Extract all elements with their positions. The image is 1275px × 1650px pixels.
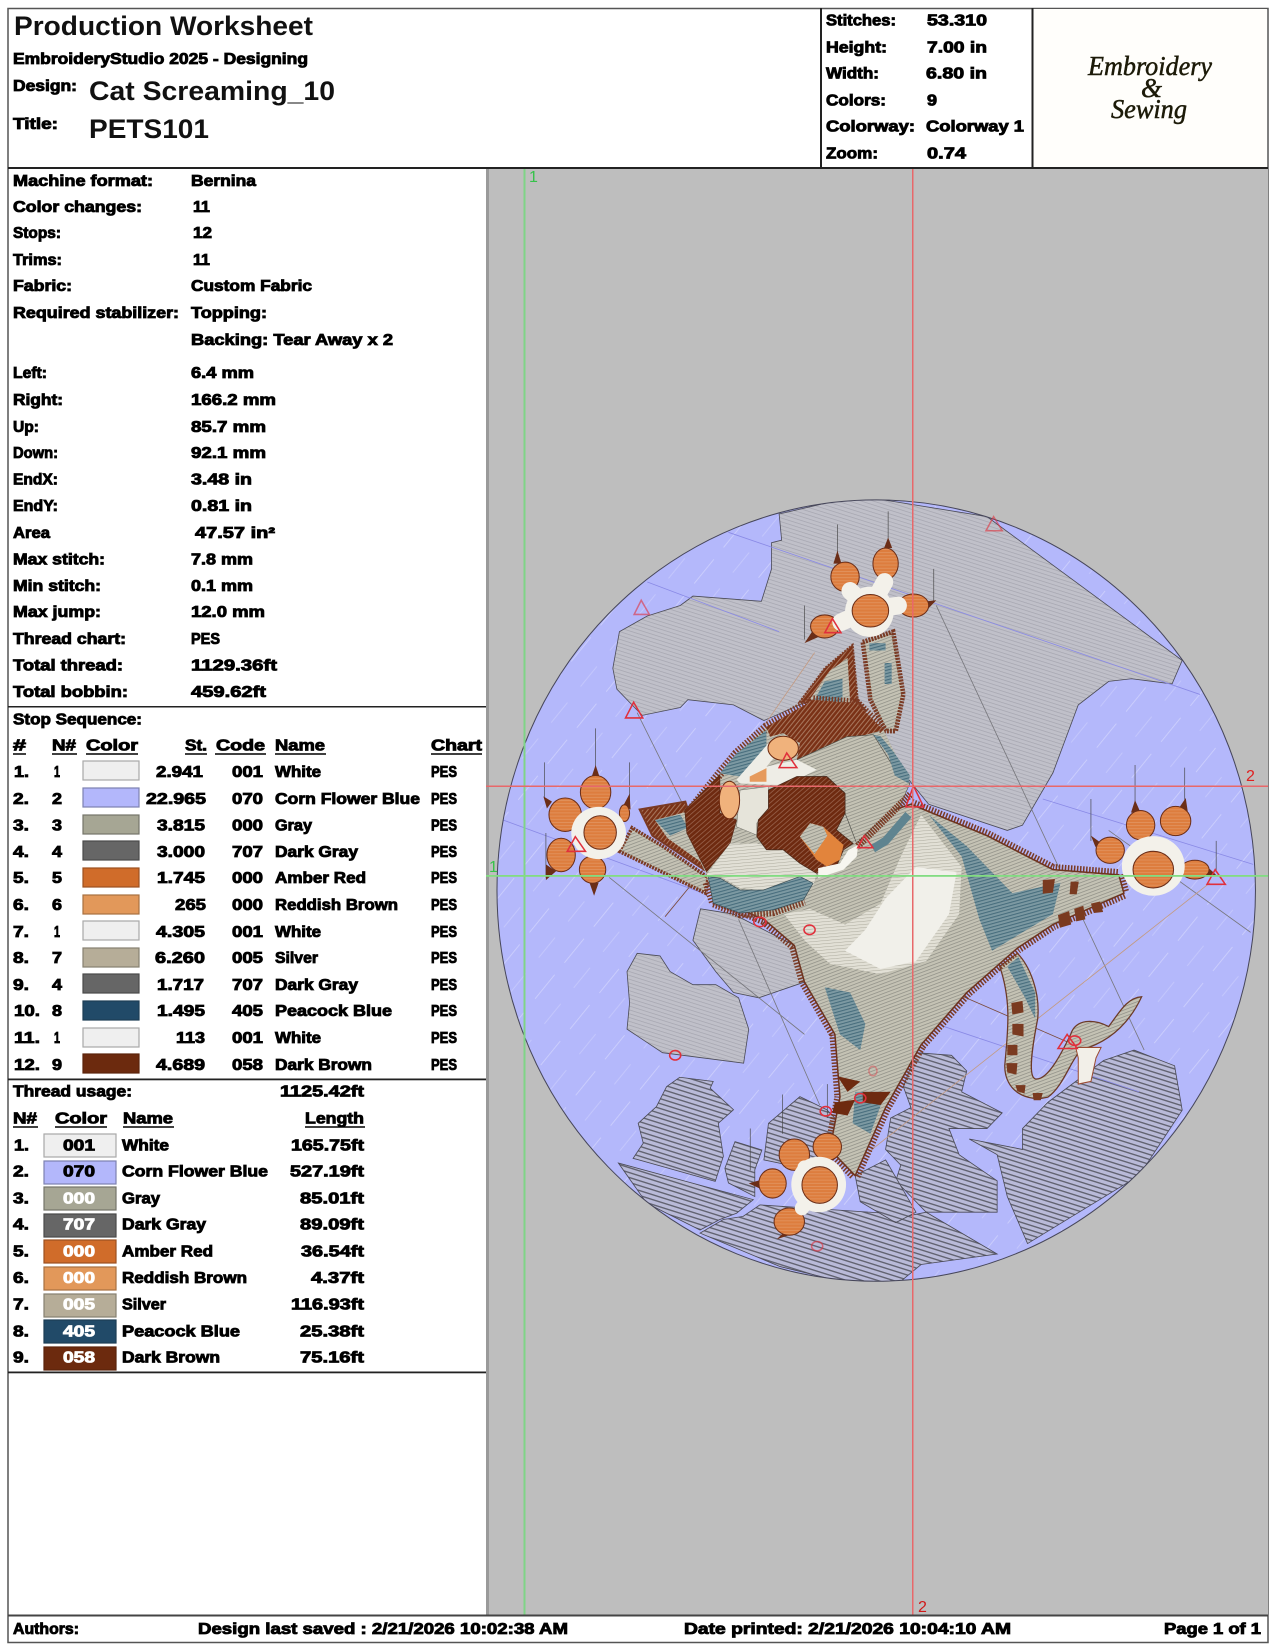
panel: machine details: Trims: [13,252,62,269]
stop rows: Corn Flower Blue [275,791,420,808]
fabric circle [497,500,1255,1281]
thread rows: 707 [63,1216,95,1234]
thread rows: 2. [13,1164,29,1180]
thread rows: 070 [63,1164,95,1180]
stop rows: PES [431,791,457,808]
stop rows: PES [431,844,457,861]
head fringe [687,700,884,815]
thread rows: Corn Flower Blue [122,1164,268,1180]
panel: machine details [13,173,393,701]
thread rows: 4.37ft [311,1270,364,1287]
thread usage total: 1125.42ft [280,1084,364,1100]
stop rows: 001 [232,764,263,781]
stop rows [13,761,457,1074]
panel: machine details: 12.0 mm [191,604,265,621]
body fringe [713,804,1124,1176]
stop rows: 22.965 [146,791,206,808]
stop rows: 2.941 [156,764,203,781]
stop rows: 3 [52,818,62,834]
thread rows: Silver [122,1296,166,1314]
stop sequence column headers: Code [216,738,265,754]
stop rows: PES [431,977,457,994]
embroidery design [497,496,1255,1285]
muzzle [737,786,768,835]
thread rows: 1. [14,1138,29,1154]
panel: design stats: 53.310 [927,12,987,30]
bottom plank right [700,1205,997,1285]
panel: machine details: Min stitch: [13,578,101,595]
panel: machine details: Area [13,525,50,542]
stop rows: 11. [14,1030,40,1047]
chin blue band [708,876,813,913]
guide labels: 1 [489,859,498,876]
stop rows: White [275,764,321,781]
stop rows: PES [431,1003,457,1020]
thread rows: Dark Gray [122,1216,206,1234]
authors: Authors: [13,1621,79,1638]
stop rows: 9 [52,1057,62,1074]
panel: design stats: 7.00 in [927,40,987,56]
stop sequence column headers: N# [52,738,76,754]
panel: design stats: Height: [826,40,887,56]
stop rows: 5 [52,870,62,887]
thread rows: 6. [13,1270,29,1287]
panel: machine details: 92.1 mm [191,445,266,462]
stop rows: 8. [13,950,29,967]
guide lines [486,168,1268,1615]
registration markers [567,517,1225,1251]
stop rows: 265 [175,897,206,914]
stop rows: PES [431,897,457,914]
thread rows: 36.54ft [301,1244,364,1260]
left eye [719,781,740,819]
thread rows: 405 [63,1324,95,1340]
panel: machine details: 6.4 mm [191,365,254,382]
stop sequence column headers: Name [275,738,325,754]
panel: thread usage [13,1084,365,1370]
stop rows: PES [431,1030,457,1047]
neck collar [858,794,911,846]
lower plank two [764,1096,836,1164]
stop rows: 1.495 [157,1003,205,1020]
panel: machine details: Required stabilizer: [13,305,179,322]
side fur gray-blue [720,730,766,777]
cat body [713,804,1124,1176]
paw top [804,538,936,643]
panel: design stats: Zoom: [826,146,878,162]
thread usage column headers: Color [55,1110,107,1128]
thread rows: 000 [63,1270,95,1287]
bottom plank center [855,1160,916,1223]
panel: machine details: 7.8 mm [191,552,253,568]
panel: design stats: Stitches: [826,12,896,30]
thread rows: 8. [13,1324,29,1340]
panel: design stats: 0.74 [927,146,966,162]
right eye [768,736,798,760]
leg blue patches [825,987,886,1134]
body base [713,804,1124,1176]
design preview panel [486,168,1268,1616]
thread rows: Dark Brown [122,1350,220,1366]
chin white [818,845,858,878]
stop rows: 001 [232,1030,263,1047]
stop rows: PES [431,1057,457,1074]
stop rows: 707 [232,977,263,994]
thread rows: 75.16ft [300,1350,364,1366]
panel: machine details: Up: [13,419,39,436]
mouth [757,777,853,873]
panel: design stats [826,12,1024,162]
logo: Embroidery & Sewing: Embroidery [1087,51,1212,81]
stop rows: 3.815 [157,818,205,834]
panel: machine details: 3.48 in [191,472,252,488]
panel: machine details: Right: [13,392,63,409]
lower head fringe [707,883,804,914]
lower face [707,843,817,890]
thread rows: 116.93ft [291,1296,364,1314]
panel: machine details: Max jump: [13,604,101,621]
stop rows: 001 [232,924,263,941]
logo: Embroidery & Sewing [1033,9,1267,167]
stop rows: 4 [52,844,62,861]
nose [750,768,766,782]
stop rows: 4 [52,977,62,994]
travel lines [503,511,1253,1170]
panel: stop sequence [13,712,482,1074]
panel: machine details: 11 [193,252,210,269]
thread rows: 25.38ft [300,1324,364,1340]
logo: Embroidery & Sewing: Sewing [1111,94,1187,124]
stop sequence column headers [13,738,482,754]
left plank [627,953,749,1063]
stop rows: PES [431,870,457,887]
top arm [863,632,903,731]
lower plank one [633,1077,734,1181]
thread usage column headers [13,1110,365,1128]
stop rows: 005 [232,950,263,967]
stop rows: Dark Gray [275,977,358,994]
stop rows: 000 [232,870,263,887]
stop rows: 2 [52,791,62,808]
thread rows: Reddish Brown [122,1270,247,1287]
stop rows: PES [431,818,457,834]
panel: machine details: 0.1 mm [191,578,253,595]
head fur [766,700,884,760]
panel: machine details: Total bobbin: [13,684,128,701]
wood planks [613,496,1182,1285]
stop rows: 000 [232,818,263,834]
stop rows: 113 [176,1030,205,1047]
panel: machine details: Down: [13,445,58,462]
stop rows: 7 [52,950,62,967]
stop rows: 4. [13,844,29,861]
panel: design stats: Colorway 1 [926,118,1024,136]
cat head [685,700,911,914]
tail with stripes and bow [1000,953,1142,1100]
software line: EmbroideryStudio 2025 - Designing [13,51,308,68]
stop rows: 1. [14,764,29,781]
stop sequence column headers: St. [185,738,207,754]
thread rows: 4. [13,1216,29,1234]
thread rows: 165.75ft [291,1138,364,1154]
stop rows: 6. [13,897,29,914]
face blue edge [873,735,910,783]
thread usage column headers: N# [13,1110,37,1128]
thread rows: 001 [63,1138,95,1154]
paw right [1091,798,1216,896]
stop rows: White [275,1030,321,1047]
thread rows: 85.01ft [300,1190,364,1208]
stop rows: White [275,924,321,941]
tongue gray [800,823,827,854]
thread rows: 5. [13,1244,29,1260]
panel: machine details: Total thread: [13,658,123,674]
stop rows: 7. [13,924,29,941]
stop rows: 6 [52,897,62,914]
upper planks [613,496,1182,830]
stop rows: 1 [54,764,60,781]
stop rows: 1.717 [157,977,204,994]
title value: PETS101 [89,114,209,144]
stop rows: 2. [13,791,29,808]
guide labels: 2 [1246,768,1255,785]
stop sequence column headers: Color [86,738,138,754]
face gray [797,735,910,843]
stop rows: Peacock Blue [275,1003,392,1020]
design label: Design: [13,78,77,95]
stop rows: 058 [232,1057,263,1074]
panel: machine details: Stops: [13,225,61,242]
panel: machine details: PES [191,631,220,648]
bottom plank left [618,1163,753,1230]
head base [685,700,910,913]
thread rows: 000 [63,1244,95,1260]
stop rows: Silver [275,950,318,967]
panel: design stats: Colors: [826,92,886,110]
forehead white [737,743,817,785]
thread usage column headers: Name [123,1110,173,1128]
thread rows: 7. [13,1296,29,1314]
stop rows: 000 [232,897,263,914]
design name: Cat Screaming_10 [89,76,335,106]
panel: machine details: 11 [193,199,210,216]
panel: header [13,11,335,144]
stop rows: Dark Gray [275,844,358,861]
top ear [799,645,865,710]
guide labels: 1 [529,169,538,186]
stop sequence heading: Stop Sequence: [13,712,142,728]
panel: machine details: 166.2 mm [191,392,276,409]
stop rows: 707 [232,844,263,861]
stop rows: Dark Brown [275,1057,372,1074]
panel: machine details: 459.62ft [191,684,266,701]
thread rows: 3. [13,1190,29,1208]
thread rows: Peacock Blue [122,1324,240,1340]
panel: design stats: 9 [927,92,937,110]
stop rows: 1.745 [157,870,205,887]
panel: machine details: Fabric: [13,278,72,295]
panel: machine details: Backing: Tear Away x 2 [191,332,393,349]
paw bottom [749,1133,846,1239]
guide labels: 2 [918,1599,927,1616]
panel: machine details: Custom Fabric [191,278,312,295]
thread rows: 89.09ft [300,1216,364,1234]
title: Production Worksheet [14,11,313,41]
belly [784,815,962,974]
footer [13,1621,1261,1638]
panel: machine details: 0.81 in [191,498,252,515]
blue side patch [929,815,1061,951]
panel: machine details: Bernina [191,173,256,190]
stop rows: 070 [232,791,263,808]
stop sequence column headers: Chart [431,738,482,754]
printed date: Date printed: 2/21/2026 10:04:10 AM [684,1621,1011,1638]
lower plank four [886,1053,1002,1212]
stop rows: 9. [13,977,29,994]
last saved date: Design last saved : 2/21/2026 10:02:38 AM [198,1621,568,1638]
panel: design stats: Width: [826,66,879,82]
panel: machine details: Topping: [191,305,267,322]
stop rows: 4.305 [156,924,205,941]
stop rows: Gray [275,818,312,834]
title label: Title: [13,116,58,133]
circle outline [497,500,1255,1281]
stop rows: 10. [14,1003,40,1020]
panel: machine details: EndX: [13,472,58,488]
thread usage heading: Thread usage: [13,1084,132,1100]
panel: machine details: Thread chart: [13,631,126,648]
paw left [543,765,631,896]
panel: machine details: Machine format: [13,173,153,190]
white belly core [845,867,957,969]
thread rows: White [122,1138,169,1154]
stop rows: 5. [13,870,29,887]
stop rows: 6.260 [155,950,205,967]
arm stripes [1043,879,1103,928]
lower plank five [969,1050,1182,1244]
stop rows: 8 [52,1003,62,1020]
stop sequence column headers: # [13,738,27,754]
left ear [640,802,708,872]
stop rows: Amber Red [275,870,366,887]
thread rows: Gray [122,1190,160,1208]
panel: design stats: Colorway: [826,118,915,136]
stop rows: 12. [14,1057,40,1074]
stop rows: 1 [54,1030,60,1047]
thread rows: 005 [63,1296,95,1314]
thread usage column headers: Length [305,1110,364,1128]
cheek fur [685,775,737,872]
tongue [800,823,844,866]
panel: machine details: 12 [193,225,212,242]
panel: machine details: 47.57 in² [195,525,275,542]
lower plank three [725,1142,762,1197]
panel: machine details: 85.7 mm [191,419,266,436]
panel: machine details: Color changes: [13,199,142,216]
page number: Page 1 of 1 [1164,1621,1261,1638]
mid plank [693,909,804,998]
panel: machine details: 1129.36ft [191,658,277,674]
stop rows: PES [431,924,457,941]
guide labels [489,169,1255,1616]
thread rows: 9. [13,1350,29,1366]
panel: design stats: 6.80 in [926,66,987,82]
stop rows: 1 [54,924,60,941]
thread rows: 527.19ft [290,1164,364,1180]
stop rows: 3. [13,818,29,834]
leg brown patches [832,1076,891,1115]
hatch texture [497,500,1255,1281]
thread rows: 058 [63,1350,95,1366]
neck collar blue [873,815,908,849]
thread rows: Amber Red [122,1244,213,1260]
stop rows: 405 [232,1003,263,1020]
thread rows: 000 [63,1190,95,1208]
panel: machine details: EndY: [13,498,58,515]
stop rows: PES [431,950,457,967]
stop rows: PES [431,764,457,781]
stop rows: 4.689 [156,1057,205,1074]
panel: machine details: Max stitch: [13,552,105,568]
thread rows [13,1134,364,1370]
stop rows: 3.000 [157,844,205,861]
stop rows: Reddish Brown [275,897,398,914]
left arm [619,828,708,893]
logo: Embroidery & Sewing: & [1141,73,1162,103]
panel: machine details: Left: [13,365,47,382]
